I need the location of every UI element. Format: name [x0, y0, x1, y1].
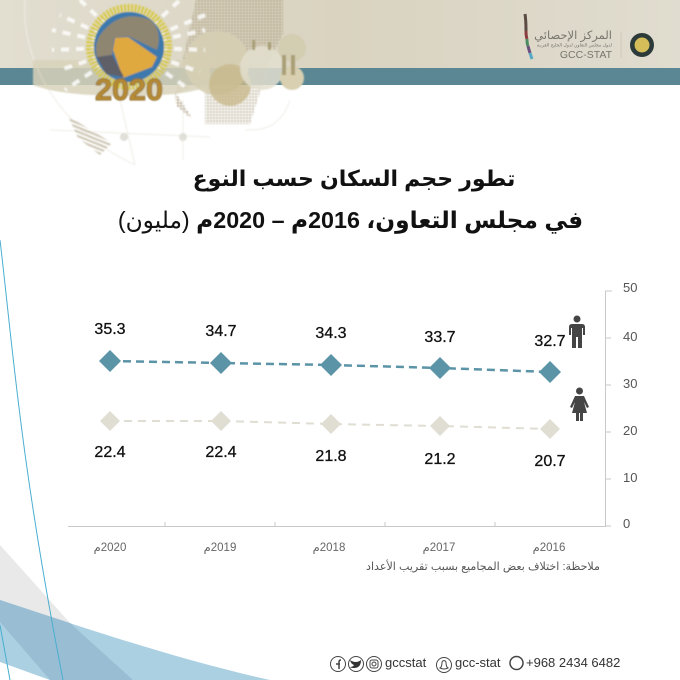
- value labels: 34.3: [315, 325, 347, 342]
- logo: GCC-STAT: لدول مجلس التعاون لدول الخليج العربية: [537, 42, 612, 48]
- line chart: [68, 280, 637, 554]
- 2020 gold numerals: 2020: [95, 72, 163, 107]
- value labels: 34.7: [205, 323, 237, 340]
- logo ribbon: [525, 14, 532, 59]
- logo: GCC-STAT: [525, 14, 654, 61]
- value labels: 21.8: [315, 448, 347, 465]
- series: male: [99, 350, 561, 383]
- value labels: 32.7: [534, 333, 566, 350]
- series: female: [100, 411, 560, 439]
- y-axis labels: 30: [623, 376, 637, 391]
- x-axis labels: 2017م: [423, 542, 455, 554]
- value labels: [94, 321, 566, 470]
- x-axis labels: 2016م: [533, 542, 565, 554]
- footer contacts: gccstat: [385, 655, 427, 670]
- footer contacts: [330, 655, 620, 672]
- social icons: [330, 656, 523, 672]
- logo: GCC-STAT: المركز الإحصائي: [534, 30, 612, 43]
- value labels: 21.2: [424, 451, 456, 468]
- axes: [68, 291, 612, 526]
- x-axis labels: 2018م: [313, 542, 345, 554]
- y-axis labels: 20: [623, 423, 637, 438]
- icon: woman: [570, 388, 589, 421]
- icon: man: [569, 316, 585, 348]
- logo: GCC-STAT: GCC-STAT: [560, 49, 613, 61]
- footer contacts: gcc-stat: [455, 655, 501, 670]
- x-axis labels: 2020م: [94, 542, 126, 554]
- GCC emblem: [630, 33, 654, 57]
- header globe artwork: [25, 0, 306, 165]
- y-axis labels: 50: [623, 280, 637, 295]
- value labels: 22.4: [205, 444, 237, 461]
- value labels: 20.7: [534, 453, 566, 470]
- note: ملاحظة: اختلاف بعض المجاميع بسبب تقريب الأعداد: [366, 559, 600, 573]
- x-axis labels: [94, 542, 565, 554]
- title: [118, 166, 583, 234]
- value labels: 22.4: [94, 444, 126, 461]
- title line 2: في مجلس التعاون، 2016م – 2020م (مليون): [118, 207, 583, 234]
- y-axis labels: 0: [623, 516, 630, 531]
- y-axis labels: 10: [623, 470, 637, 485]
- header banner: [0, 0, 680, 85]
- y-axis labels: [623, 280, 637, 531]
- value labels: 33.7: [424, 329, 456, 346]
- bottom-left decorative shapes: [0, 240, 270, 680]
- title line 1: تطور حجم السكان حسب النوع: [193, 166, 515, 192]
- value labels: 35.3: [94, 321, 126, 338]
- y-axis labels: 40: [623, 329, 637, 344]
- x-axis labels: 2019م: [204, 542, 236, 554]
- footer contacts: +968 2434 6482: [526, 655, 620, 670]
